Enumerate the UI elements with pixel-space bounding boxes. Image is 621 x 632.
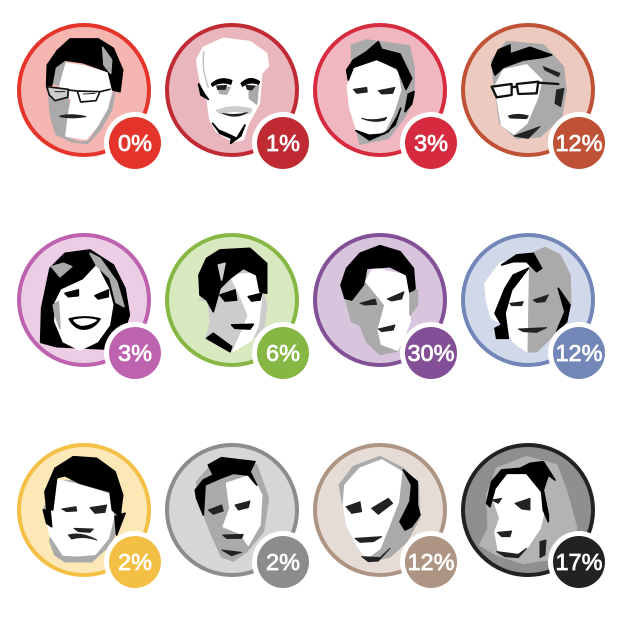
portrait 6	[199, 248, 267, 352]
badge 7: 30%	[407, 340, 455, 366]
badge 9	[104, 531, 166, 593]
portrait 12	[480, 457, 577, 563]
badge 6	[252, 322, 314, 384]
badge 4	[548, 112, 610, 174]
badge 12	[548, 531, 610, 593]
candidate 11: 12%	[315, 445, 462, 593]
candidate 8: 12%	[463, 235, 610, 384]
badge 1	[104, 112, 166, 174]
portrait 1	[47, 39, 123, 143]
portrait 3	[347, 40, 414, 144]
badge 3: 3%	[414, 130, 448, 156]
candidate 6: 6%	[167, 235, 314, 384]
badge 7	[400, 322, 462, 384]
candidate 10: 2%	[167, 445, 314, 593]
portrait 8	[485, 248, 571, 352]
candidate 5: 3%	[19, 235, 166, 384]
badge 2: 1%	[266, 130, 300, 156]
portrait 10	[195, 458, 268, 561]
candidate 4: 12%	[463, 25, 610, 174]
candidate 1: 0%	[19, 25, 166, 174]
badge 12: 17%	[555, 549, 603, 575]
badge 4: 12%	[555, 130, 603, 156]
badge 10: 2%	[266, 549, 300, 575]
candidate 12: 17%	[463, 445, 610, 593]
badge 2	[252, 112, 314, 174]
portrait 2	[197, 38, 268, 143]
badge 6: 6%	[266, 340, 300, 366]
candidate 9: 2%	[19, 445, 166, 593]
portrait 5	[41, 250, 129, 350]
candidate 2: 1%	[167, 25, 314, 174]
badge 10	[252, 531, 314, 593]
badge 9: 2%	[118, 549, 152, 575]
badge 3	[400, 112, 462, 174]
badge 5	[104, 322, 166, 384]
portrait 11	[339, 457, 420, 562]
badge 1: 0%	[118, 130, 152, 156]
badge 8	[548, 322, 610, 384]
candidate 3: 3%	[315, 25, 462, 174]
portrait 4	[492, 42, 566, 138]
portrait 7	[341, 246, 417, 354]
candidate 7: 30%	[315, 235, 462, 384]
badge 5: 3%	[118, 340, 152, 366]
portrait 9	[43, 457, 125, 562]
badge 11	[400, 531, 462, 593]
badge 11: 12%	[407, 549, 455, 575]
badge 8: 12%	[555, 340, 603, 366]
